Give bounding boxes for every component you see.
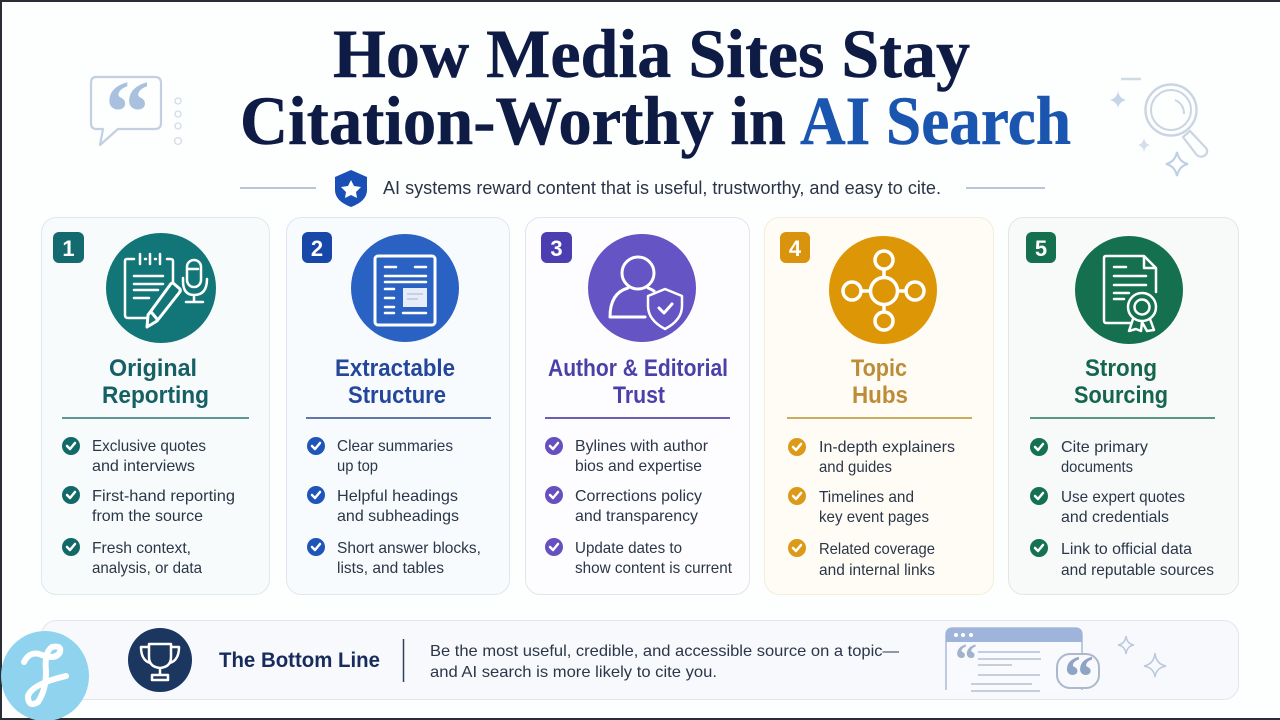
badge 1: 1: [62, 236, 75, 261]
title: How Media Sites Stay: [333, 16, 970, 92]
checklist: First-hand reporting: [92, 488, 235, 505]
heading: Extractable: [335, 355, 455, 382]
checklist: [1030, 438, 1214, 579]
checklist: documents: [1061, 459, 1133, 476]
icon: notepad pencil microphone: [106, 233, 216, 343]
bottom line heading: The Bottom Line: [219, 649, 380, 672]
icon: quote speech bubble: [91, 63, 181, 162]
panel: 5 Strong Sourcing: [1008, 218, 1238, 594]
checklist: and credentials: [1061, 509, 1169, 526]
panel: the bottom line: [42, 620, 1238, 710]
checklist: and reputable sources: [1061, 562, 1214, 579]
checklist: Fresh context,: [92, 540, 191, 557]
icon: sparkles: [1118, 636, 1166, 677]
panel: 1 Original Reporting: [42, 218, 270, 594]
icon: trophy: [128, 628, 192, 692]
bottom line text: and AI search is more likely to cite you.: [430, 664, 717, 681]
icon: certified document: [1075, 236, 1183, 344]
heading: Structure: [348, 382, 446, 409]
icon: browser page with quote: [946, 628, 1099, 710]
checklist: Use expert quotes: [1061, 489, 1185, 506]
subtitle with shield: AI systems reward content that is useful, trustworthy, and easy to cite.: [383, 178, 941, 198]
badge 4: 4: [789, 236, 802, 261]
checklist: Timelines and: [819, 489, 914, 506]
icon: magnifying glass and sparkles: [1110, 79, 1207, 176]
badge 3: [541, 232, 572, 263]
heading: [548, 355, 728, 409]
checklist: Bylines with author: [575, 438, 709, 455]
checklist: and transparency: [575, 508, 698, 525]
checklist: [62, 437, 235, 577]
badge 4: [780, 232, 810, 263]
panel: 2 Extractable Structure: [286, 218, 510, 594]
title: Citation-Worthy in: [240, 83, 786, 159]
icon: article document: [351, 234, 459, 342]
heading: Trust: [613, 382, 665, 409]
icon: browser page with quote: “: [1064, 644, 1094, 710]
checklist: Update dates to: [575, 540, 682, 557]
checklist: [307, 437, 481, 577]
checklist: [788, 438, 955, 579]
checklist: In-depth explainers: [819, 439, 955, 456]
subtitle with shield: [240, 170, 1045, 207]
checklist: Helpful headings: [337, 488, 458, 505]
checklist: Link to official data: [1061, 541, 1192, 558]
checklist: up top: [337, 458, 378, 475]
badge 5: [1026, 232, 1056, 263]
icon: browser page with quote: “: [955, 635, 977, 684]
heading: Hubs: [852, 382, 908, 409]
badge 2: 2: [311, 236, 323, 261]
checklist: bios and expertise: [575, 458, 702, 475]
checklist: from the source: [92, 508, 203, 525]
badge 1: [53, 232, 84, 263]
checklist: Related coverage: [819, 541, 935, 558]
badge 2: [302, 232, 332, 263]
heading: Topic: [851, 355, 907, 382]
logo badge: [1, 631, 89, 720]
panel: 3 Author and Editorial Trust: [526, 218, 750, 594]
checklist: and internal links: [819, 562, 935, 579]
checklist: [545, 437, 733, 577]
heading: [851, 355, 908, 409]
icon: author with shield: [588, 234, 696, 342]
checklist: Clear summaries: [337, 438, 453, 455]
badge 3: 3: [550, 236, 563, 261]
checklist: Exclusive quotes: [92, 438, 206, 455]
bottom line text: [430, 643, 899, 681]
heading: Original: [109, 355, 197, 382]
heading: [335, 355, 455, 409]
heading: Strong: [1085, 355, 1157, 382]
checklist: Corrections policy: [575, 488, 702, 505]
checklist: and interviews: [92, 458, 195, 475]
bottom line text: Be the most useful, credible, and accessible source on a topic—: [430, 643, 899, 660]
checklist: and subheadings: [337, 508, 459, 525]
icon: hub network: [829, 236, 937, 344]
icon: quote speech bubble: “: [105, 63, 150, 162]
title: [240, 16, 1071, 159]
icon: shield with star: [335, 170, 367, 207]
heading: Author & Editorial: [548, 355, 728, 382]
badge 5: 5: [1035, 236, 1047, 261]
heading: Reporting: [102, 382, 209, 409]
heading: [1074, 355, 1168, 409]
checklist: Cite primary: [1061, 439, 1148, 456]
panel: 4 Topic Hubs: [764, 218, 994, 594]
checklist: Short answer blocks,: [337, 540, 481, 557]
checklist: key event pages: [819, 509, 929, 526]
title: AI Search: [800, 83, 1071, 159]
checklist: show content is current: [575, 560, 733, 577]
heading: Sourcing: [1074, 382, 1168, 409]
heading: [102, 355, 209, 409]
checklist: and guides: [819, 459, 892, 476]
checklist: analysis, or data: [92, 560, 202, 577]
checklist: lists, and tables: [337, 560, 444, 577]
